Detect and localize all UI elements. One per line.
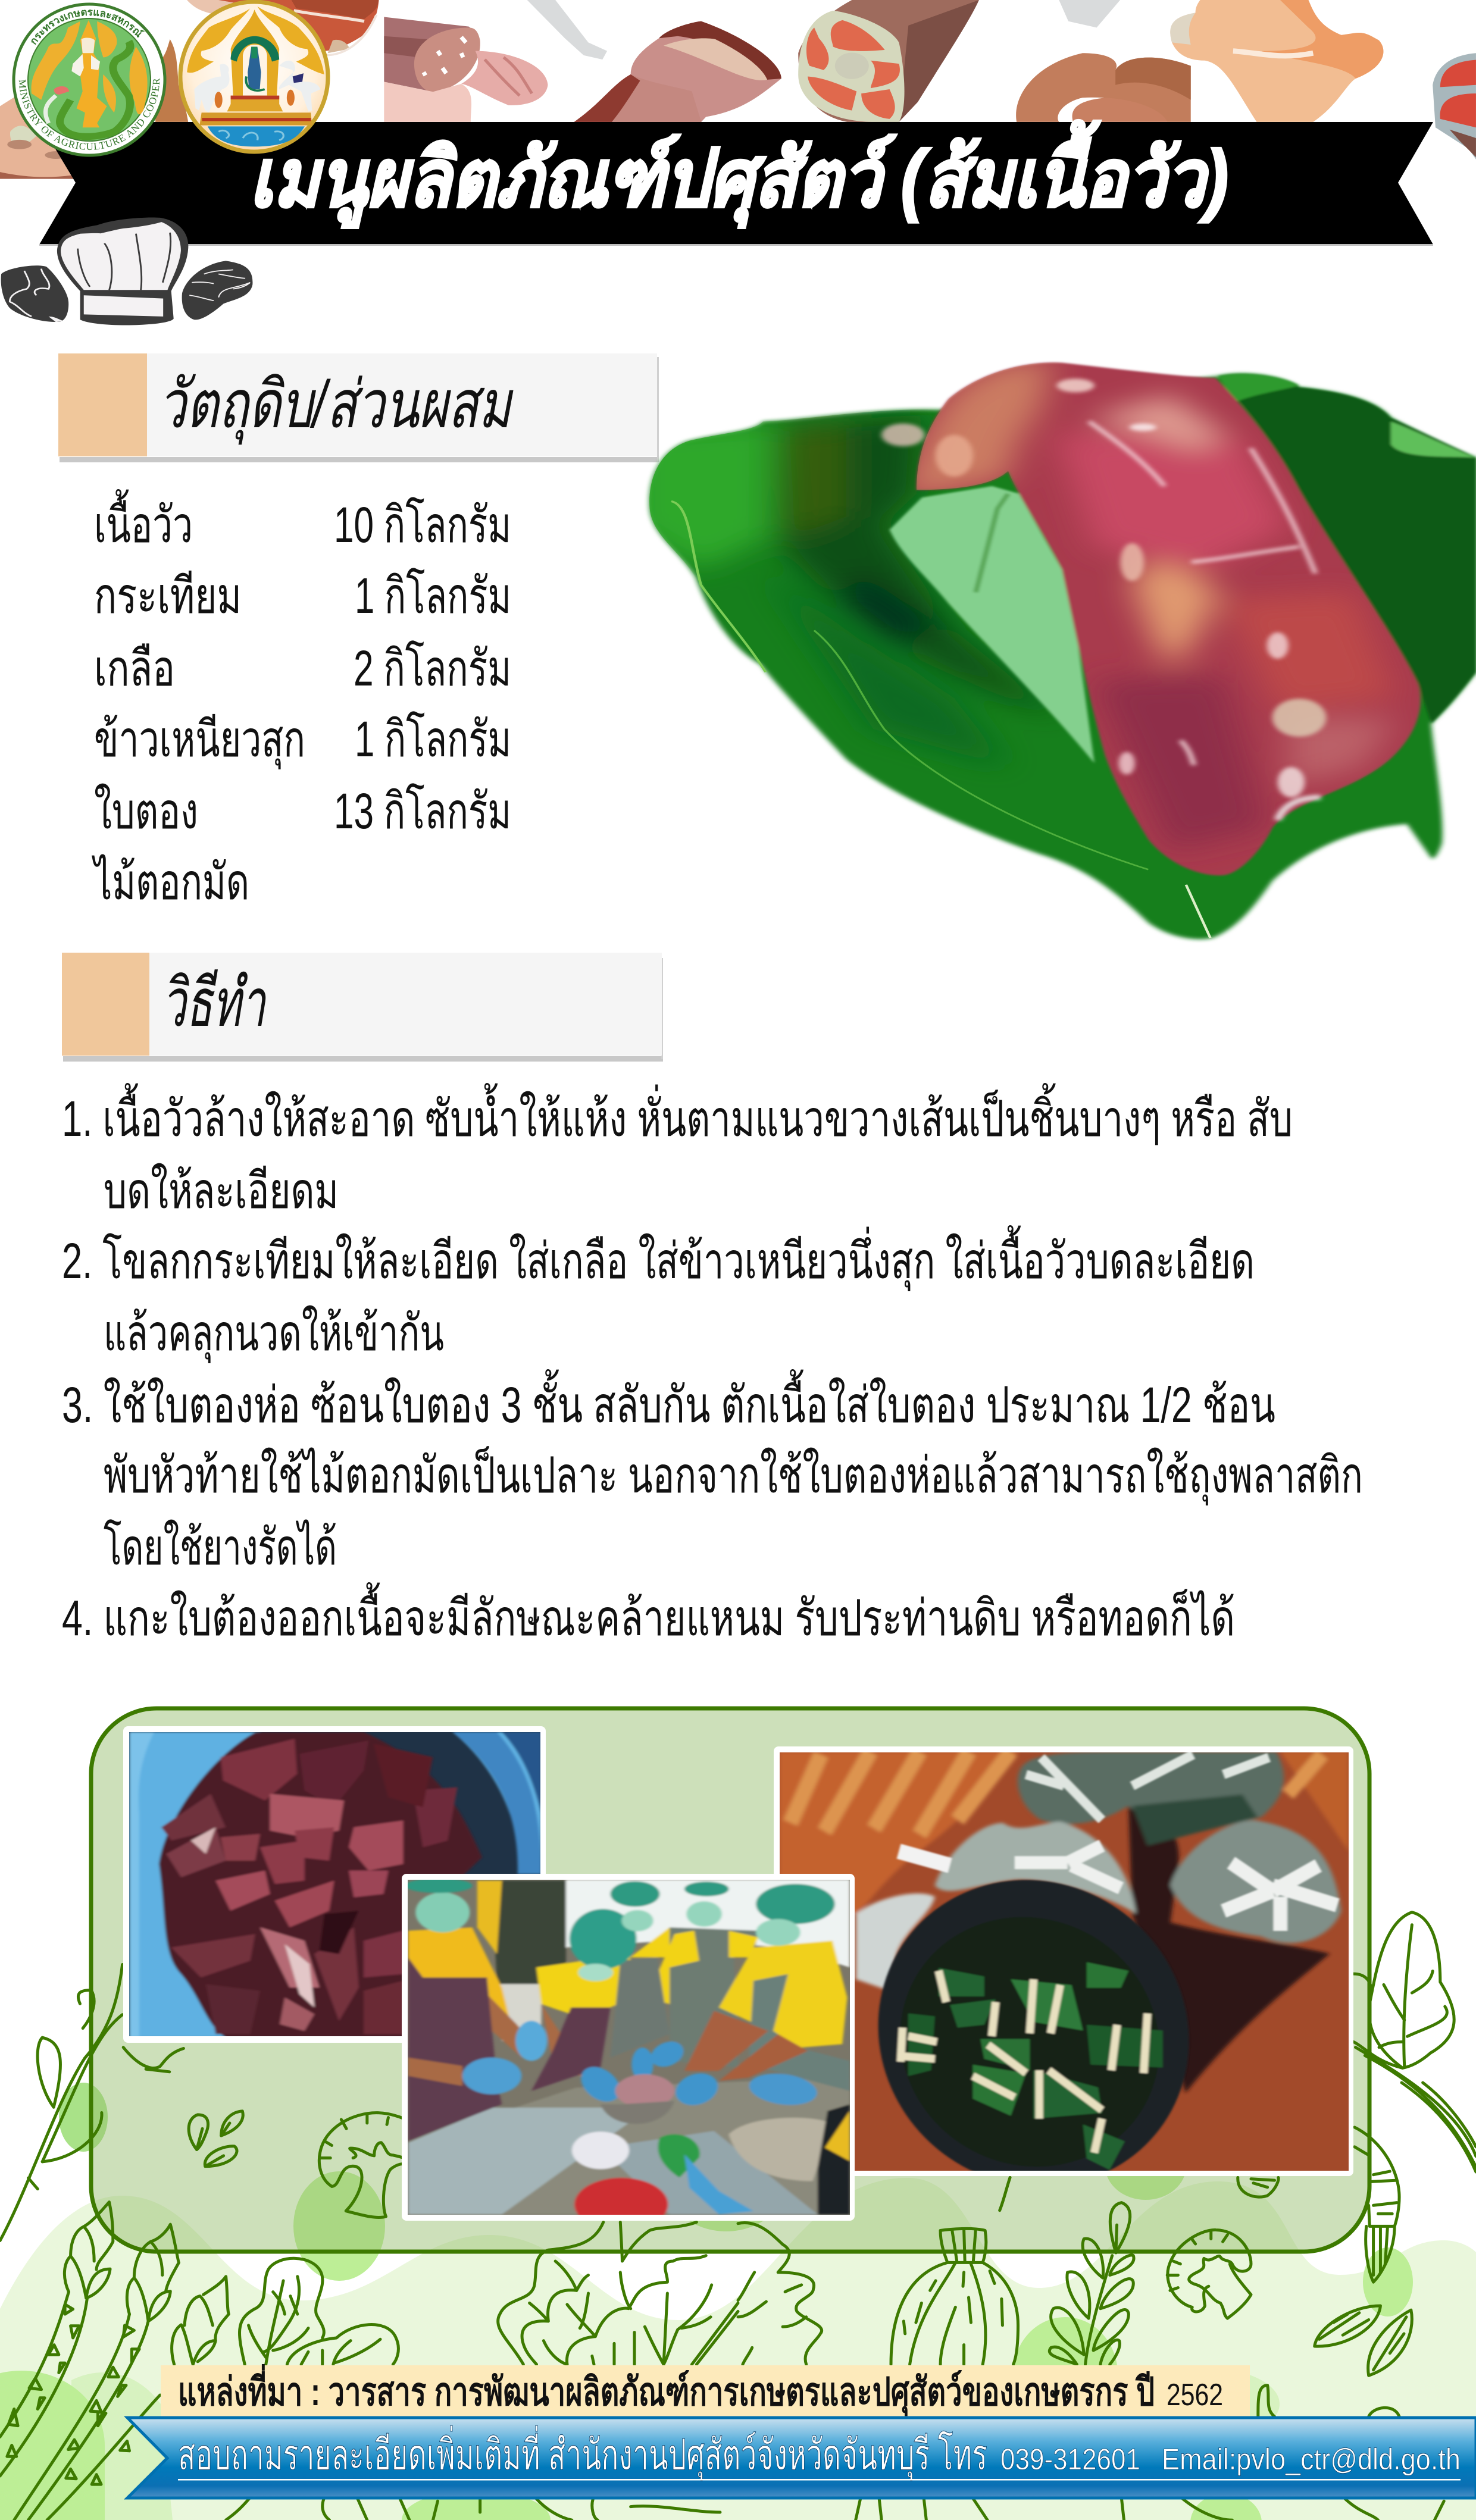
salami — [384, 17, 548, 122]
contact ribbon — [127, 2418, 1476, 2498]
source bar: แหล่งที่มา : วารสาร การพัฒนาผลิตภัณฑ์การเกษตรและปศุสัตว์ของเกษตรกร ปี — [178, 2364, 1155, 2416]
method steps: บดให้ละเอียดม — [104, 1163, 339, 1219]
logo: Ministry of Agriculture and Cooperatives seal: กระทรวงเกษตรและสหกรณ์ — [31, 10, 145, 45]
leaf shading — [631, 414, 1062, 767]
contact ribbon: สอบถามรายละเอียดเพิ่มเติมที่ สำนักงานปศุสัตว์จังหวัดจันทบุรี โทร — [178, 2425, 987, 2481]
naga — [60, 42, 130, 137]
flame scrolls — [187, 8, 250, 73]
vegetable line drawings, left part — [0, 2111, 738, 2520]
sausages — [1016, 53, 1191, 122]
water — [208, 126, 305, 146]
deity — [71, 20, 107, 127]
right steak — [182, 261, 252, 320]
spinach top right — [1353, 1912, 1476, 2167]
ingredients list: ใบตอง — [94, 783, 198, 839]
temple flames small — [215, 92, 223, 108]
background: pale green waves — [0, 2083, 1476, 2520]
band — [199, 112, 312, 126]
red meat at top behind second seal — [187, 0, 379, 55]
right dark leaf — [1218, 374, 1476, 724]
photo: sour beef wrapped in banana leaf — [631, 360, 1476, 939]
ingredients list — [92, 489, 511, 910]
ingredients list: เกลือ — [94, 640, 175, 696]
asparagus three — [172, 2277, 229, 2364]
shrine roof — [231, 10, 279, 96]
lettuce — [498, 2222, 738, 2364]
pale inner leaf — [890, 486, 1095, 763]
light leaf patch — [1391, 421, 1476, 458]
title banner — [39, 120, 1433, 246]
title text: เมนูผลิตภัณฑ์ปศุสัตว์ (ส้มเนื้อวัว) — [249, 120, 1228, 228]
chicken leg — [1170, 0, 1383, 122]
ingredients list: 2 กิโลกรัม — [354, 640, 511, 696]
ingredients list: ไม้ตอกมัด — [92, 854, 249, 910]
method steps: โดยใช้ยางรัดได้ — [104, 1519, 337, 1575]
altar base — [227, 96, 283, 111]
left joint of meat — [0, 39, 188, 179]
photo: workers in yellow shirts mixing meat — [402, 1874, 855, 2231]
leaf base — [649, 374, 1476, 939]
ribbon: food illustrations across top — [384, 0, 1476, 159]
stems below contact ribbon — [226, 2499, 720, 2520]
left stem sprig — [0, 1965, 183, 2241]
method steps: แล้วคลุกนวดให้เข้ากัน — [104, 1305, 444, 1364]
photo: basket of wrapped meat parcels — [774, 1746, 1353, 2196]
ingredients list: กระเทียม — [94, 568, 242, 624]
heading: method: วิธีทำ — [162, 966, 267, 1040]
zucchini — [891, 2228, 1018, 2364]
right spinach plant and left sprig — [0, 1912, 1476, 2241]
lettuce right edge — [738, 2222, 822, 2364]
hat puff and band — [57, 217, 188, 325]
vegetable line drawings, right part — [738, 2083, 1476, 2520]
asparagus two — [14, 2224, 179, 2520]
ham — [574, 21, 781, 122]
photo: blue bowl of raw beef — [123, 1726, 546, 2043]
flames — [32, 21, 80, 100]
steak cross-section — [798, 0, 979, 122]
panel: photo collage background — [91, 1708, 1369, 2252]
heading: ingredients — [58, 353, 659, 462]
mushroom — [1167, 2230, 1251, 2318]
heading: ingredients: วัตถุดิบ/ส่วนผสม — [158, 367, 514, 445]
ingredients list: 10 กิโลกรัม — [334, 497, 511, 553]
ingredients list: 1 กิโลกรัม — [355, 711, 511, 767]
faint grey bones — [527, 0, 1120, 60]
asparagus one — [0, 2202, 113, 2476]
meat — [917, 362, 1421, 875]
steak at right edge — [1433, 53, 1476, 159]
meat illustrations behind the seals — [0, 0, 379, 179]
paired leaves — [1315, 2306, 1412, 2375]
ingredients list: 1 กิโลกรัม — [355, 568, 511, 624]
ingredients list: ข้าวเหนียวสุก — [94, 711, 305, 770]
sprout stem with leaves — [1049, 2203, 1134, 2364]
horse — [279, 61, 321, 111]
leaf veins — [671, 501, 1211, 938]
logo: Department of Livestock Development seal — [180, 2, 328, 152]
carrot on right — [1355, 2127, 1399, 2282]
meat shading — [900, 360, 1396, 850]
spinach leaf plant — [240, 2258, 398, 2364]
small marks under frame and bottom leaves — [856, 2083, 1476, 2520]
ingredients list: 13 กิโลกรัม — [334, 783, 511, 839]
ingredients list: เนื้อวัว — [94, 489, 193, 553]
fat streaks — [1089, 421, 1315, 574]
contact ribbon: 039-312601 — [1000, 2443, 1140, 2476]
panel sprigs and broccoli — [189, 2111, 417, 2218]
left steak — [1, 265, 68, 322]
ox — [194, 64, 229, 112]
source bar — [161, 2364, 1250, 2418]
icon: chef hat with two steaks — [1, 217, 252, 325]
heading: method — [62, 953, 663, 1062]
method steps — [62, 1083, 1363, 1646]
source bar: 2562 — [1167, 2378, 1223, 2412]
